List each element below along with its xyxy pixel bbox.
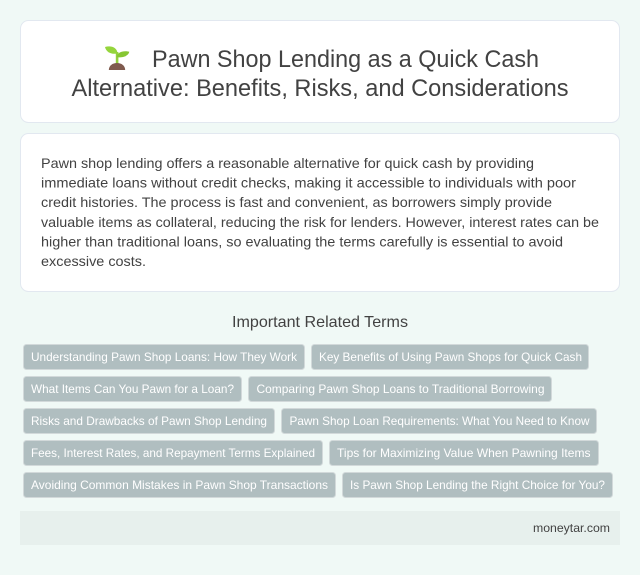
- title text: Alternative: Benefits, Risks, and Considerations: [72, 75, 568, 102]
- tag: [24, 440, 322, 466]
- tag: Pawn Shop Loan Requirements: What You Need to Know: [290, 414, 590, 428]
- footer source: moneytar.com: [533, 521, 610, 535]
- title text: Pawn Shop Lending as a Quick Cash: [152, 46, 539, 73]
- footer: [20, 511, 620, 545]
- summary paragraph: valuable items as collateral, reducing the risk for lenders. However, interest rates can be: [41, 214, 599, 230]
- tag: What Items Can You Pawn for a Loan?: [31, 382, 234, 396]
- title text: [72, 46, 568, 102]
- tag: [24, 376, 242, 402]
- summary paragraph: Pawn shop lending offers a reasonable alternative for quick cash by providing: [41, 155, 534, 171]
- tag: Tips for Maximizing Value When Pawning Items: [337, 446, 590, 460]
- summary paragraph: [41, 155, 599, 269]
- tag: [330, 440, 598, 466]
- summary paragraph: immediate loans without credit checks, making it accessible to individuals with poor: [41, 175, 576, 191]
- panel: summary card: [20, 134, 620, 292]
- tag: Fees, Interest Rates, and Repayment Terms Explained: [31, 446, 315, 460]
- tag: Understanding Pawn Shop Loans: How They Work: [31, 350, 298, 364]
- panel: title card: [20, 20, 620, 122]
- summary paragraph: higher than traditional loans, so evaluating the terms carefully is essential to avoid: [41, 233, 563, 249]
- tag: [24, 472, 336, 498]
- heading: important related terms: Important Related Terms: [232, 314, 408, 331]
- tag: [24, 408, 274, 434]
- tag: Key Benefits of Using Pawn Shops for Quick Cash: [319, 350, 582, 364]
- tag: [24, 344, 304, 370]
- tag: [312, 344, 588, 370]
- tag: [282, 408, 596, 434]
- tag: [248, 376, 552, 402]
- tag: Comparing Pawn Shop Loans to Traditional Borrowing: [256, 382, 544, 396]
- tag list: [24, 344, 612, 498]
- tag: Avoiding Common Mistakes in Pawn Shop Transactions: [31, 478, 328, 492]
- icon: seedling: [105, 46, 129, 70]
- summary paragraph: credit histories. The process is fast and convenient, as borrowers simply provide: [41, 194, 552, 210]
- tag: Is Pawn Shop Lending the Right Choice for You?: [350, 478, 605, 492]
- summary paragraph: excessive costs.: [41, 253, 146, 269]
- tag: Risks and Drawbacks of Pawn Shop Lending: [31, 414, 267, 428]
- tag: [342, 472, 612, 498]
